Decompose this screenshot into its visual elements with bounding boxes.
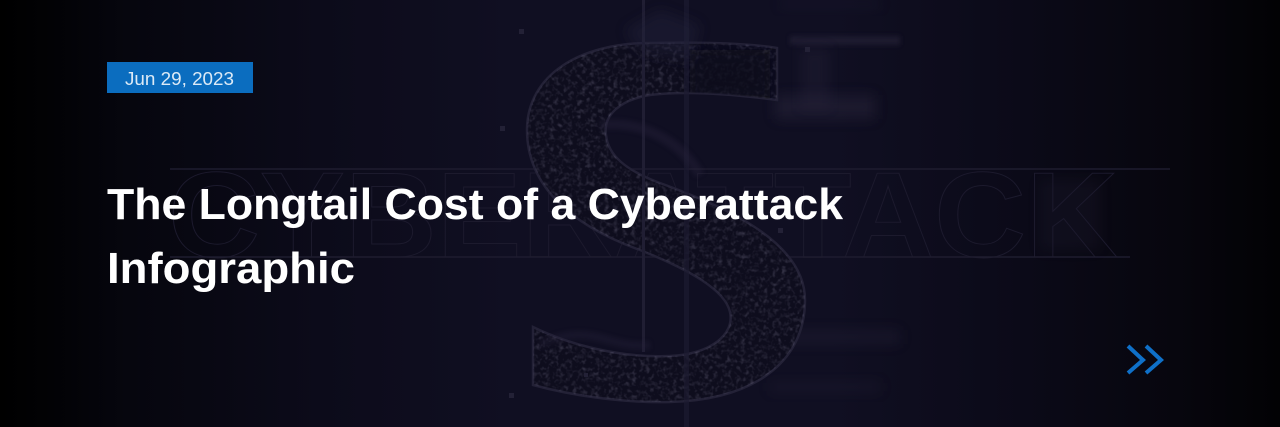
- background art: CYBERATTACK outlined word: CYBERATTACK: [168, 147, 1118, 283]
- title: [107, 180, 844, 293]
- icon: double chevron arrow: [1128, 346, 1161, 373]
- date badge: [107, 62, 253, 93]
- background art: dollar sign: [500, 0, 815, 427]
- title: The Longtail Cost of a Cyberattack: [107, 180, 844, 229]
- title: Infographic: [107, 244, 355, 293]
- background art: light streaks: [770, 0, 1100, 392]
- date badge: Jun 29, 2023: [125, 68, 234, 89]
